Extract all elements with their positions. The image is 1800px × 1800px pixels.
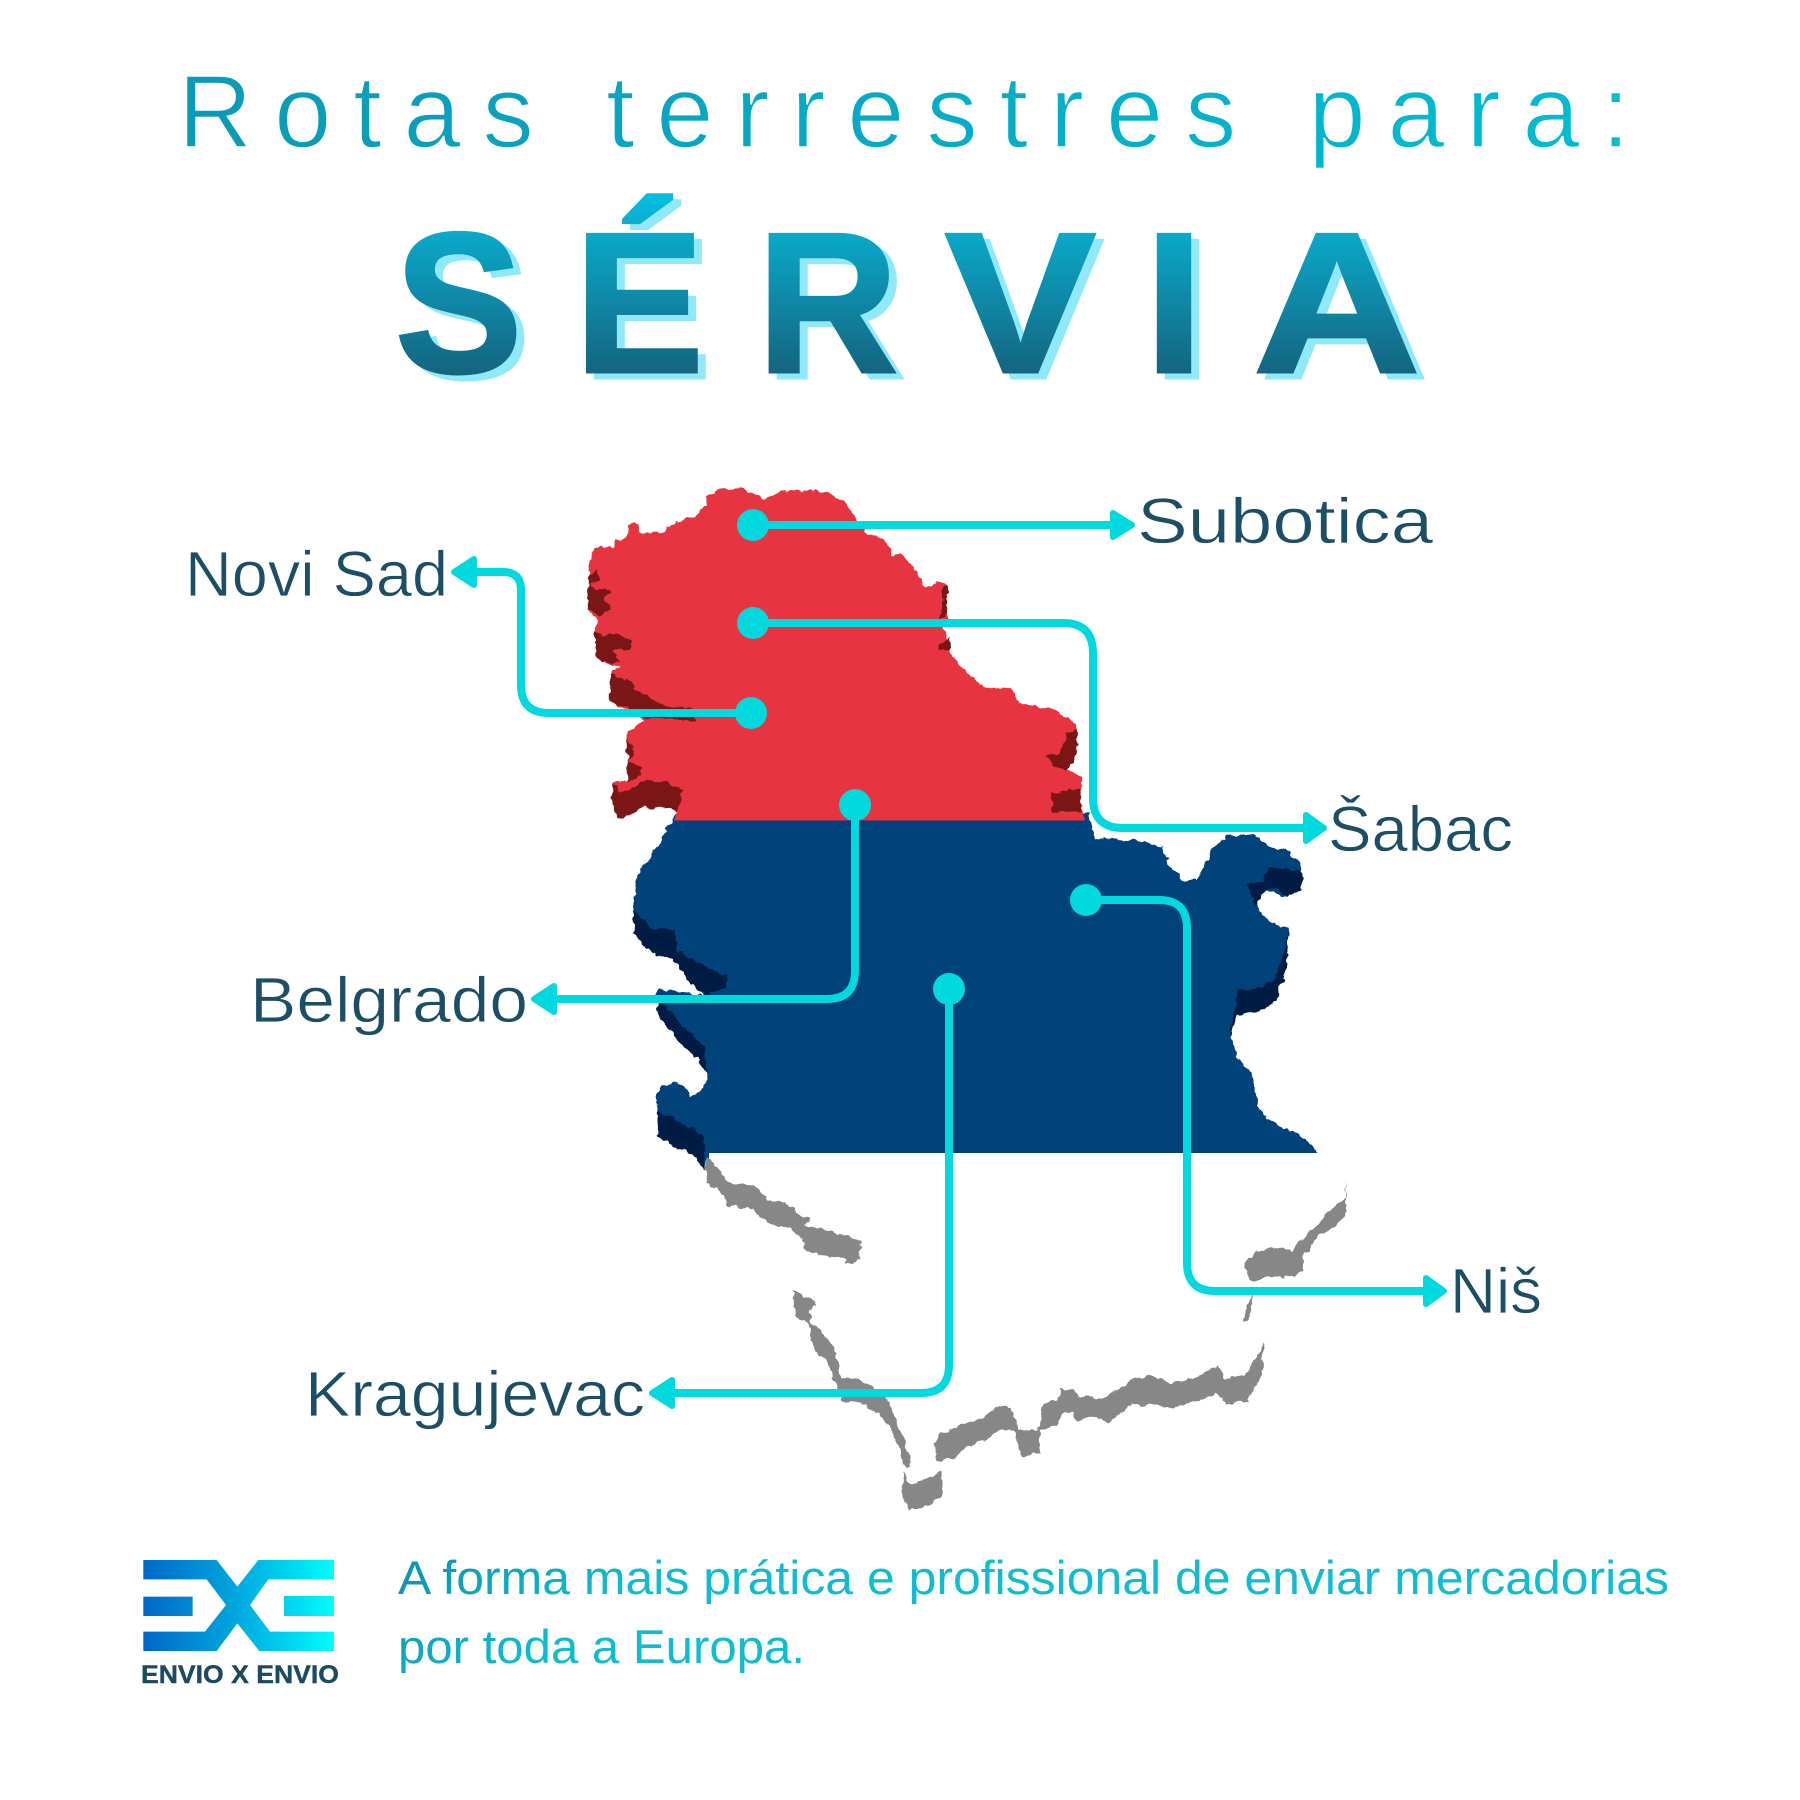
logo: Envio X Envio (141, 1560, 339, 1689)
logo mark (143, 1560, 334, 1651)
route: Subotica (737, 509, 1132, 541)
heading: SÉRVIA: A (1253, 191, 1421, 414)
label: Kragujevac: Kragujevac (305, 1358, 645, 1430)
footer tagline (398, 1551, 1669, 1673)
map: white band relief (707, 1157, 1346, 1510)
footer tagline: por toda a Europa. (398, 1620, 805, 1673)
route: Niš (1070, 884, 1444, 1304)
logo wordmark: ENVIO X ENVIO (141, 1661, 339, 1689)
map: white band (709, 1153, 1334, 1179)
route: Novi Sad (454, 559, 767, 729)
map of Serbia as flag (588, 488, 1346, 1510)
route: Kragujevac (652, 973, 965, 1406)
label: Šabac: Šabac (1328, 793, 1513, 865)
footer tagline: A forma mais prática e profissional de enviar mercadorias (398, 1551, 1669, 1604)
route: Šabac (737, 607, 1324, 841)
label: Niš: Niš (1450, 1255, 1542, 1327)
heading: SÉRVIA: É (574, 191, 704, 415)
heading: SÉRVIA: V (945, 192, 1096, 415)
route: Belgrado (534, 789, 871, 1012)
title: Rotas terrestres para: Rotas terrestres para: (178, 54, 1630, 169)
heading: SÉRVIA: S (395, 192, 522, 415)
heading: SÉRVIA: I (1144, 192, 1204, 415)
heading: SÉRVIA: R (757, 191, 898, 414)
label: Belgrado: Belgrado (250, 964, 528, 1036)
map: blue band (634, 813, 1322, 1172)
heading: SÉRVIA (395, 191, 1421, 415)
label: Novi Sad: Novi Sad (185, 538, 448, 610)
map: red band (588, 488, 1089, 830)
label: Subotica: Subotica (1137, 485, 1433, 557)
